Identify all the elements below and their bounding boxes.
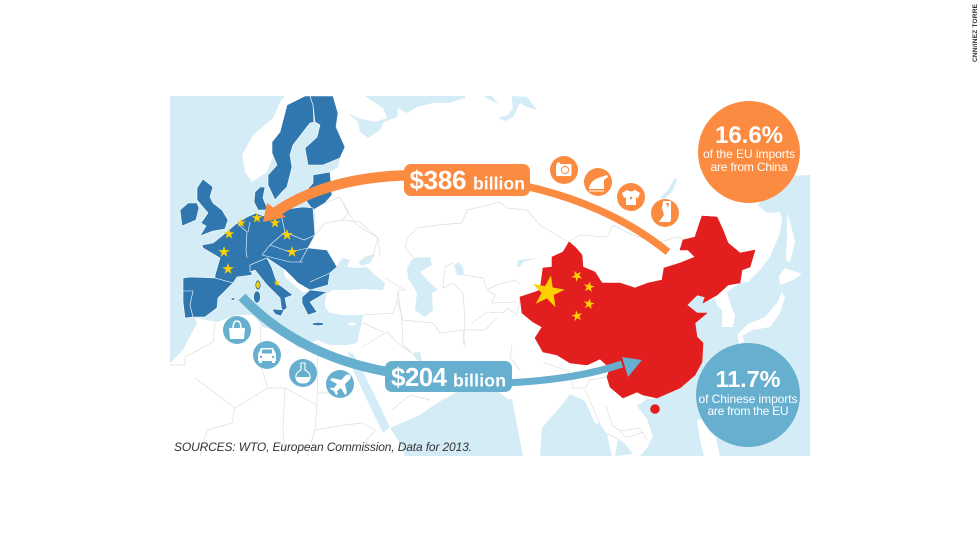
Denmark — [254, 187, 268, 210]
callout: Chinese imports from EU: are from the EU — [708, 404, 788, 418]
credit: CNN/INEZ TORRE — [972, 3, 979, 62]
EU internal borders — [183, 210, 330, 317]
mainland EU — [202, 207, 337, 290]
seas and oceans — [170, 96, 810, 456]
callout: Chinese imports from EU: of Chinese imports — [698, 392, 798, 406]
infographic — [170, 4, 977, 456]
EU countries — [180, 96, 345, 326]
Iberia — [183, 277, 233, 318]
label: $386 billion: $386 — [410, 165, 466, 195]
China — [520, 216, 755, 414]
callout: Chinese imports from EU — [696, 343, 800, 447]
icon: handbag — [223, 316, 251, 344]
label: $204 billion — [385, 361, 512, 392]
callout: EU imports from China: of the EU imports — [703, 147, 795, 161]
icon: boot — [651, 199, 679, 227]
icon: iron — [584, 168, 612, 196]
United Kingdom — [197, 179, 228, 236]
Greece — [302, 290, 327, 315]
EU stars — [218, 212, 298, 288]
label: $386 billion: billion — [473, 174, 525, 194]
Ireland — [180, 203, 199, 226]
arrow: EU to China — [242, 297, 642, 383]
islands and non-EU land — [242, 96, 802, 456]
label: $204 billion: billion — [453, 370, 506, 390]
icon: car — [253, 341, 281, 369]
icon: t-shirt — [617, 183, 645, 211]
China flag stars — [533, 271, 595, 322]
source note: SOURCES: WTO, European Commission, Data for 2013. — [174, 440, 472, 454]
callout: EU imports from China — [698, 101, 800, 203]
label: $204 billion: $204 — [391, 362, 448, 392]
icon: flask — [289, 359, 317, 387]
Sweden — [268, 96, 314, 200]
Finland — [305, 96, 345, 165]
icon: airplane — [326, 370, 354, 398]
callout: EU imports from China: 16.6% — [715, 122, 783, 149]
arrow: China to EU — [263, 175, 668, 252]
Italy — [250, 258, 293, 312]
map background — [170, 96, 810, 456]
Baltic states — [305, 172, 332, 210]
callout: EU imports from China: are from China — [710, 160, 788, 174]
label: $386 billion — [404, 164, 530, 196]
icon: camera — [550, 156, 578, 184]
callout: Chinese imports from EU: 11.7% — [716, 366, 781, 392]
country borders — [170, 197, 687, 456]
